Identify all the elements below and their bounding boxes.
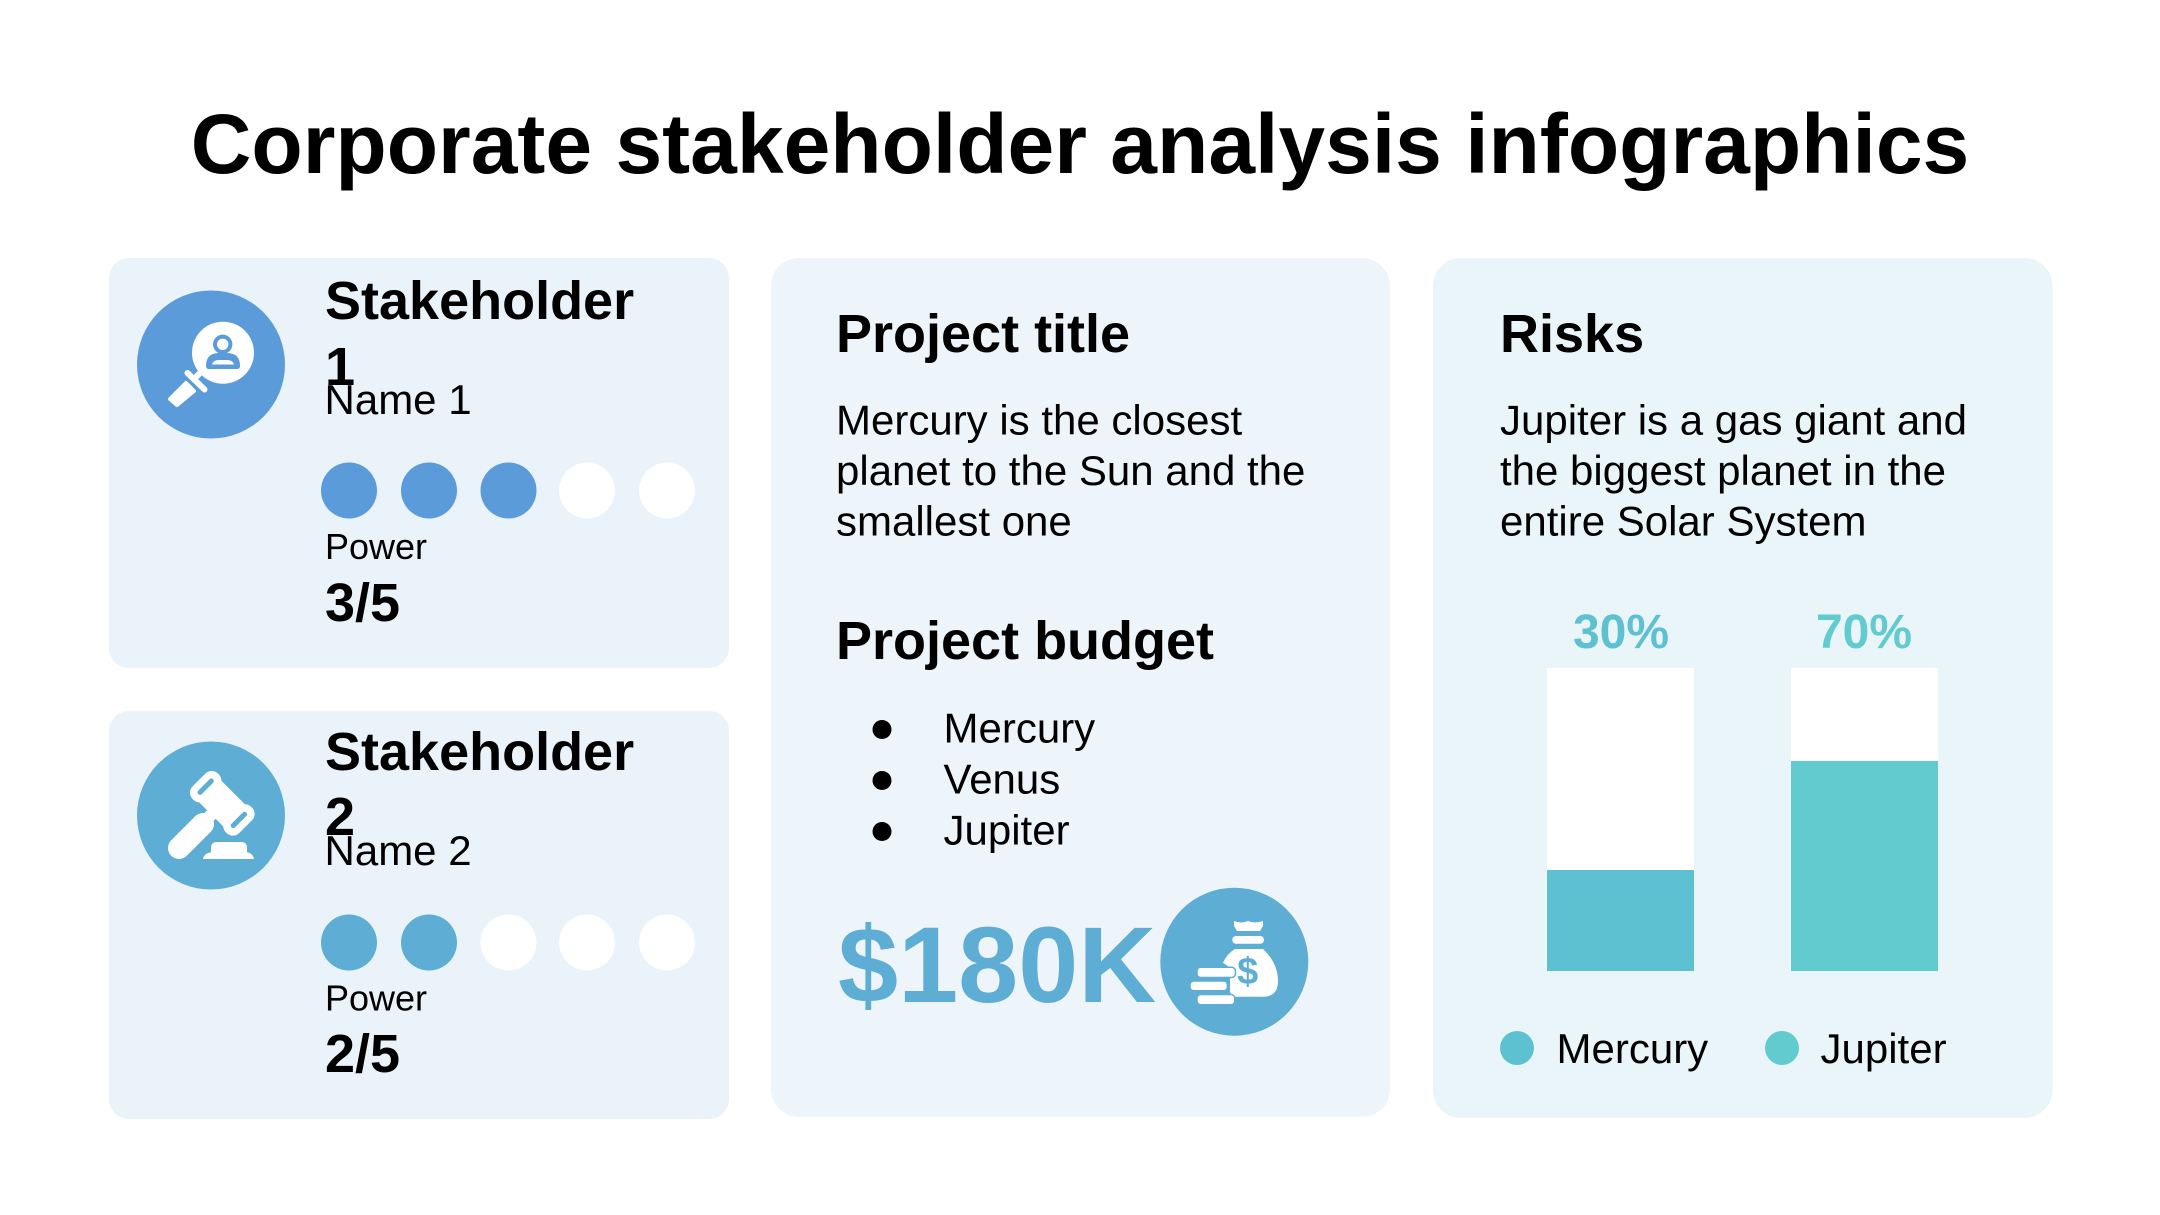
- power rating dots: [321, 462, 695, 518]
- icon: money bag: [1160, 888, 1308, 1036]
- icon: magnifier with person: [137, 290, 285, 438]
- project description: Mercury is the closest: [836, 396, 1242, 444]
- project description: smallest one: [836, 498, 1072, 544]
- heading: project budget: Project budget: [836, 611, 1214, 671]
- power score: 2/5: [325, 1024, 400, 1084]
- panel: risks: [1433, 258, 2052, 1118]
- icon: gavel: [137, 742, 285, 890]
- legend: Mercury: [1556, 1025, 1708, 1072]
- icon: money bag: $: [1237, 951, 1258, 993]
- panel: stakeholder 1: [109, 258, 729, 668]
- power rating dots: [321, 914, 695, 970]
- risks description: Jupiter is a gas giant and: [1500, 396, 1967, 444]
- name 2: Name 2: [324, 827, 472, 874]
- project description: planet to the Sun and the: [836, 447, 1305, 494]
- legend: [1500, 1025, 1947, 1072]
- heading: project title: Project title: [836, 304, 1130, 364]
- bar chart: [1547, 606, 1938, 971]
- power score: 3/5: [325, 573, 400, 633]
- budget amount: $180K: [838, 904, 1156, 1025]
- power label: Power: [325, 526, 427, 567]
- value label: 30%: 30%: [1573, 606, 1669, 659]
- panel: stakeholder 2: [109, 711, 729, 1119]
- budget list: Venus: [944, 756, 1060, 802]
- bar: jupiter: [1791, 668, 1938, 971]
- value label: 70%: 70%: [1816, 606, 1912, 659]
- risks description: the biggest planet in the: [1500, 447, 1946, 494]
- budget list: Mercury: [944, 704, 1095, 752]
- risks description: entire Solar System: [1500, 498, 1866, 544]
- heading number: 1: 1: [325, 337, 355, 397]
- panel: project: [771, 258, 1390, 1117]
- heading: stakeholder 2: Stakeholder: [325, 722, 634, 782]
- heading number: 2: 2: [325, 787, 355, 847]
- legend: Jupiter: [1820, 1025, 1947, 1072]
- title: Corporate stakeholder analysis infographics: [191, 97, 1969, 191]
- heading: risks: Risks: [1500, 304, 1644, 364]
- budget list: [872, 704, 1095, 854]
- power label: Power: [325, 978, 427, 1018]
- bar: mercury: [1547, 668, 1694, 971]
- name 1: Name 1: [324, 376, 472, 423]
- budget list: Jupiter: [944, 806, 1070, 854]
- heading: stakeholder 1: Stakeholder: [325, 271, 634, 331]
